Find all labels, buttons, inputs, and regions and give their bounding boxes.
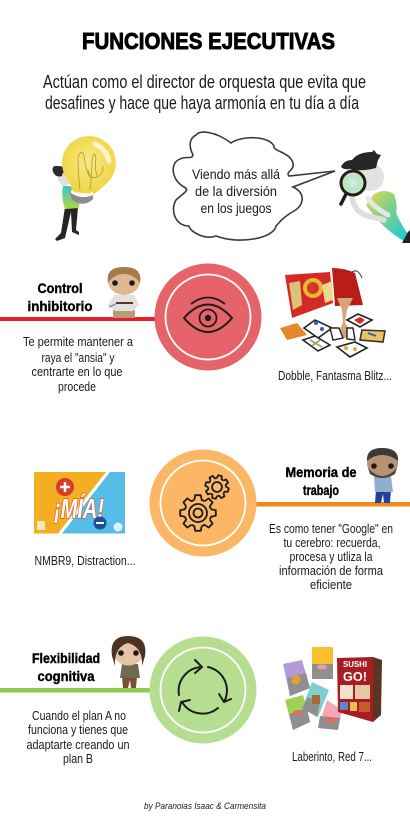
orange line xyxy=(255,502,410,506)
heading xyxy=(28,280,92,314)
text xyxy=(26,708,130,766)
icon: funko figure with beard xyxy=(367,448,398,503)
game photo: Sushi Go cards and tin: SUSHI xyxy=(343,660,367,669)
text: información de forma xyxy=(279,563,384,578)
circle icon: cycle arrows xyxy=(150,636,256,744)
panel: flexibilidad cognitiva xyxy=(0,636,382,766)
heading: Flexibilidad xyxy=(32,650,100,666)
text: eficiente xyxy=(310,577,352,592)
text: plan B xyxy=(63,751,93,766)
subtitle xyxy=(43,72,366,113)
icon: funko figure with dark hair xyxy=(112,636,145,688)
credit: by Paranoias Isaac & Carmensita xyxy=(144,801,266,812)
icon: person with magnifying glass xyxy=(341,150,410,243)
text: centrarte en lo que xyxy=(32,364,122,379)
text xyxy=(23,334,134,394)
heading xyxy=(32,650,100,684)
game box: Mia xyxy=(34,472,125,534)
title: FUNCIONES EJECUTIVAS xyxy=(82,28,335,54)
text: adaptarte creando un xyxy=(26,737,130,752)
heading: inhibitorio xyxy=(28,298,92,314)
text: tu cerebro: recuerda, xyxy=(284,535,380,550)
heading: cognitiva xyxy=(38,668,95,684)
text xyxy=(269,521,393,592)
circle icon: eye xyxy=(154,264,262,370)
game photo: Sushi Go cards and tin: GO! xyxy=(343,669,367,684)
circle icon: gears xyxy=(150,450,256,556)
panel: control inhibitorio xyxy=(0,264,392,394)
game caption: Laberinto, Red 7... xyxy=(292,749,372,764)
game photo: Sushi Go cards and tin xyxy=(283,647,382,730)
text: raya el "ansia" y xyxy=(42,350,115,365)
heading: trabajo xyxy=(303,482,339,498)
game photo: red box with cards xyxy=(280,268,385,357)
game box: Mia: ¡MÍA! xyxy=(54,493,104,524)
text: Cuando el plan A no xyxy=(32,708,126,723)
heading xyxy=(286,464,357,498)
game caption: NMBR9, Distraction... xyxy=(34,553,136,568)
speech bubble text: en los juegos xyxy=(200,200,272,216)
red line xyxy=(0,317,156,321)
speech bubble text xyxy=(192,166,280,216)
speech bubble text: Viendo más allá xyxy=(192,166,280,182)
icon: person carrying light bulb xyxy=(53,136,116,241)
speech bubble xyxy=(173,132,335,240)
heading: Memoria de xyxy=(286,464,357,480)
icon: funko figure in white robe xyxy=(108,267,140,318)
text: procede xyxy=(58,379,96,394)
text: Te permite mantener a xyxy=(23,334,134,349)
panel: memoria de trabajo xyxy=(34,448,410,592)
speech bubble text: de la diversión xyxy=(195,183,277,199)
text: funciona y tienes que xyxy=(28,722,128,737)
text: procesa y utliza la xyxy=(290,549,373,564)
heading: Control xyxy=(38,280,82,296)
green line xyxy=(0,688,150,692)
